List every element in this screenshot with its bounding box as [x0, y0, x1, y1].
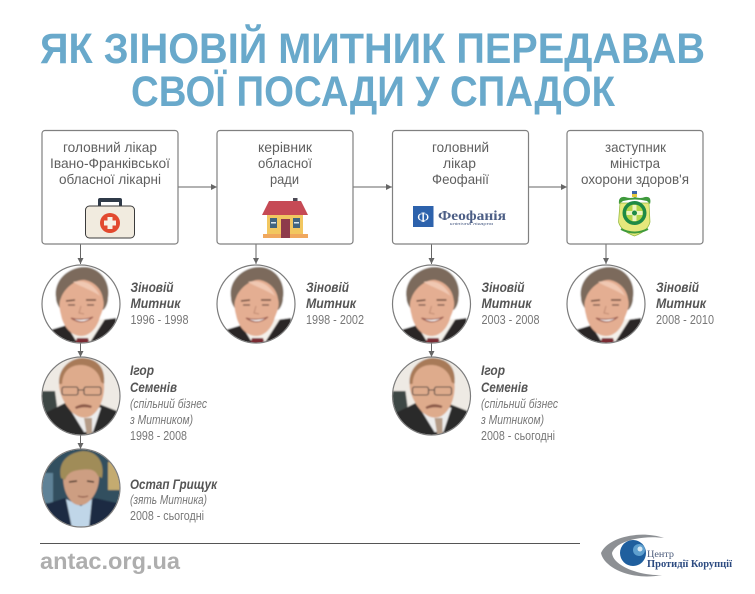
- arrow: box 1 to box 2: [178, 186, 217, 188]
- panel: regional hospital head: обласної лікарні: [59, 171, 161, 187]
- panel: deputy health minister: заступник: [605, 139, 667, 155]
- person: Mytnyk 2008-2010: [566, 264, 714, 344]
- person: Mytnyk 2008-2010: Зіновій: [656, 279, 699, 295]
- panel: regional hospital head: Івано-Франківської: [50, 155, 170, 171]
- arrow: box 4 to Mytnyk: [605, 244, 607, 264]
- panel: regional council head: обласної: [258, 155, 312, 171]
- arrow: Mytnyk to Semeniv, Feofania: [430, 343, 432, 357]
- icon: Feofania logo: клінічна лікарня: [450, 222, 493, 226]
- portrait: Mytnyk: [216, 264, 296, 344]
- arrow: box 3 to Mytnyk: [430, 244, 432, 264]
- person: Semeniv 1998-2008: 1998 - 2008: [130, 429, 187, 443]
- panel: deputy health minister: охорони здоров'я: [581, 171, 689, 187]
- icon: first aid kit: [86, 198, 134, 238]
- person: Hryshchuk: [41, 448, 218, 528]
- arrow: Semeniv to Hryshchuk: [80, 435, 82, 449]
- person: Semeniv 2008-present: (спільний бізнес: [481, 397, 559, 411]
- panel: deputy health minister: [567, 130, 703, 244]
- panel: Feofania head doctor: [392, 130, 528, 244]
- portrait: Semeniv: [41, 356, 121, 436]
- panel: Feofania head doctor: лікар: [443, 155, 476, 171]
- person: Mytnyk 1996-1998: Митник: [130, 295, 181, 311]
- person: Mytnyk 1998-2002: Зіновій: [306, 279, 349, 295]
- portrait: Hryshchuk: [41, 448, 121, 528]
- person: Hryshchuk: 2008 - сьогодні: [130, 509, 204, 523]
- arrow: box 2 to Mytnyk: [255, 244, 257, 264]
- portrait: Mytnyk: [566, 264, 646, 344]
- arrow: box 1 to Mytnyk: [80, 244, 82, 264]
- logo: Anti-Corruption Action Centre: Центр: [647, 550, 674, 560]
- panel: Feofania head doctor: Феофанії: [432, 171, 489, 187]
- person: Mytnyk 2003-2008: [392, 264, 540, 344]
- person: Mytnyk 1996-1998: [41, 264, 189, 344]
- person: Mytnyk 1998-2002: 1998 - 2002: [306, 313, 364, 327]
- person: Hryshchuk: Остап Грищук: [130, 476, 218, 492]
- icon: Feofania logo: Феофанія: [438, 209, 506, 224]
- person: Mytnyk 2003-2008: Зіновій: [482, 279, 525, 295]
- panel: deputy health minister: міністра: [610, 155, 660, 171]
- person: Mytnyk 2008-2010: 2008 - 2010: [656, 313, 714, 327]
- person: Semeniv 1998-2008: Ігор: [130, 362, 154, 378]
- person: Hryshchuk: (зять Митника): [130, 493, 207, 507]
- person: Mytnyk 2003-2008: 2003 - 2008: [482, 313, 540, 327]
- panel: regional hospital head: [42, 130, 178, 244]
- person: Semeniv 2008-present: з Митником): [480, 413, 544, 427]
- person: Mytnyk 1998-2002: Митник: [306, 295, 357, 311]
- person: Mytnyk 2008-2010: Митник: [656, 295, 707, 311]
- icon: Feofania logo: Ф: [417, 210, 429, 226]
- logo: Anti-Corruption Action Centre: Протидії Корупції: [647, 559, 732, 570]
- logo: Anti-Corruption Action Centre: [601, 535, 732, 576]
- person: Semeniv 1998-2008: (спільний бізнес: [130, 397, 208, 411]
- panel: regional council head: ради: [270, 171, 299, 187]
- person: Mytnyk 1996-1998: Зіновій: [130, 279, 174, 295]
- arrow: Mytnyk to Semeniv: [80, 343, 82, 357]
- person: Semeniv 1998-2008: з Митником): [129, 413, 193, 427]
- person: Mytnyk 2003-2008: Митник: [482, 295, 532, 311]
- icon: ministry emblem: [618, 191, 650, 236]
- person: Semeniv 1998-2008: [41, 356, 208, 443]
- panel: regional council head: [217, 130, 353, 244]
- arrow: box 2 to box 3: [353, 186, 392, 188]
- icon: Feofania logo: [413, 206, 506, 227]
- title: СВОЇ ПОСАДИ У СПАДОК: [131, 68, 616, 116]
- person: Semeniv 2008-present: Ігор: [481, 362, 505, 378]
- panel: regional council head: керівник: [258, 139, 313, 155]
- person: Mytnyk 1996-1998: 1996 - 1998: [130, 313, 189, 327]
- footer: site address: antac.org.ua: [40, 548, 180, 574]
- panel: regional hospital head: головний лікар: [63, 139, 157, 155]
- arrow: box 3 to box 4: [528, 186, 567, 188]
- person: Semeniv 1998-2008: Семенів: [130, 379, 177, 395]
- portrait: Mytnyk: [41, 264, 121, 344]
- portrait: Mytnyk: [392, 264, 472, 344]
- person: Semeniv 2008-present: Семенів: [481, 379, 528, 395]
- person: Semeniv 2008-present: 2008 - сьогодні: [481, 429, 555, 443]
- title: [40, 24, 705, 116]
- panel: Feofania head doctor: головний: [432, 139, 489, 155]
- portrait: Semeniv: [392, 356, 472, 436]
- person: Semeniv 2008-present: [392, 356, 559, 443]
- person: Mytnyk 1998-2002: [216, 264, 364, 344]
- title: ЯК ЗІНОВІЙ МИТНИК ПЕРЕДАВАВ: [40, 24, 705, 73]
- icon: house: [262, 198, 308, 238]
